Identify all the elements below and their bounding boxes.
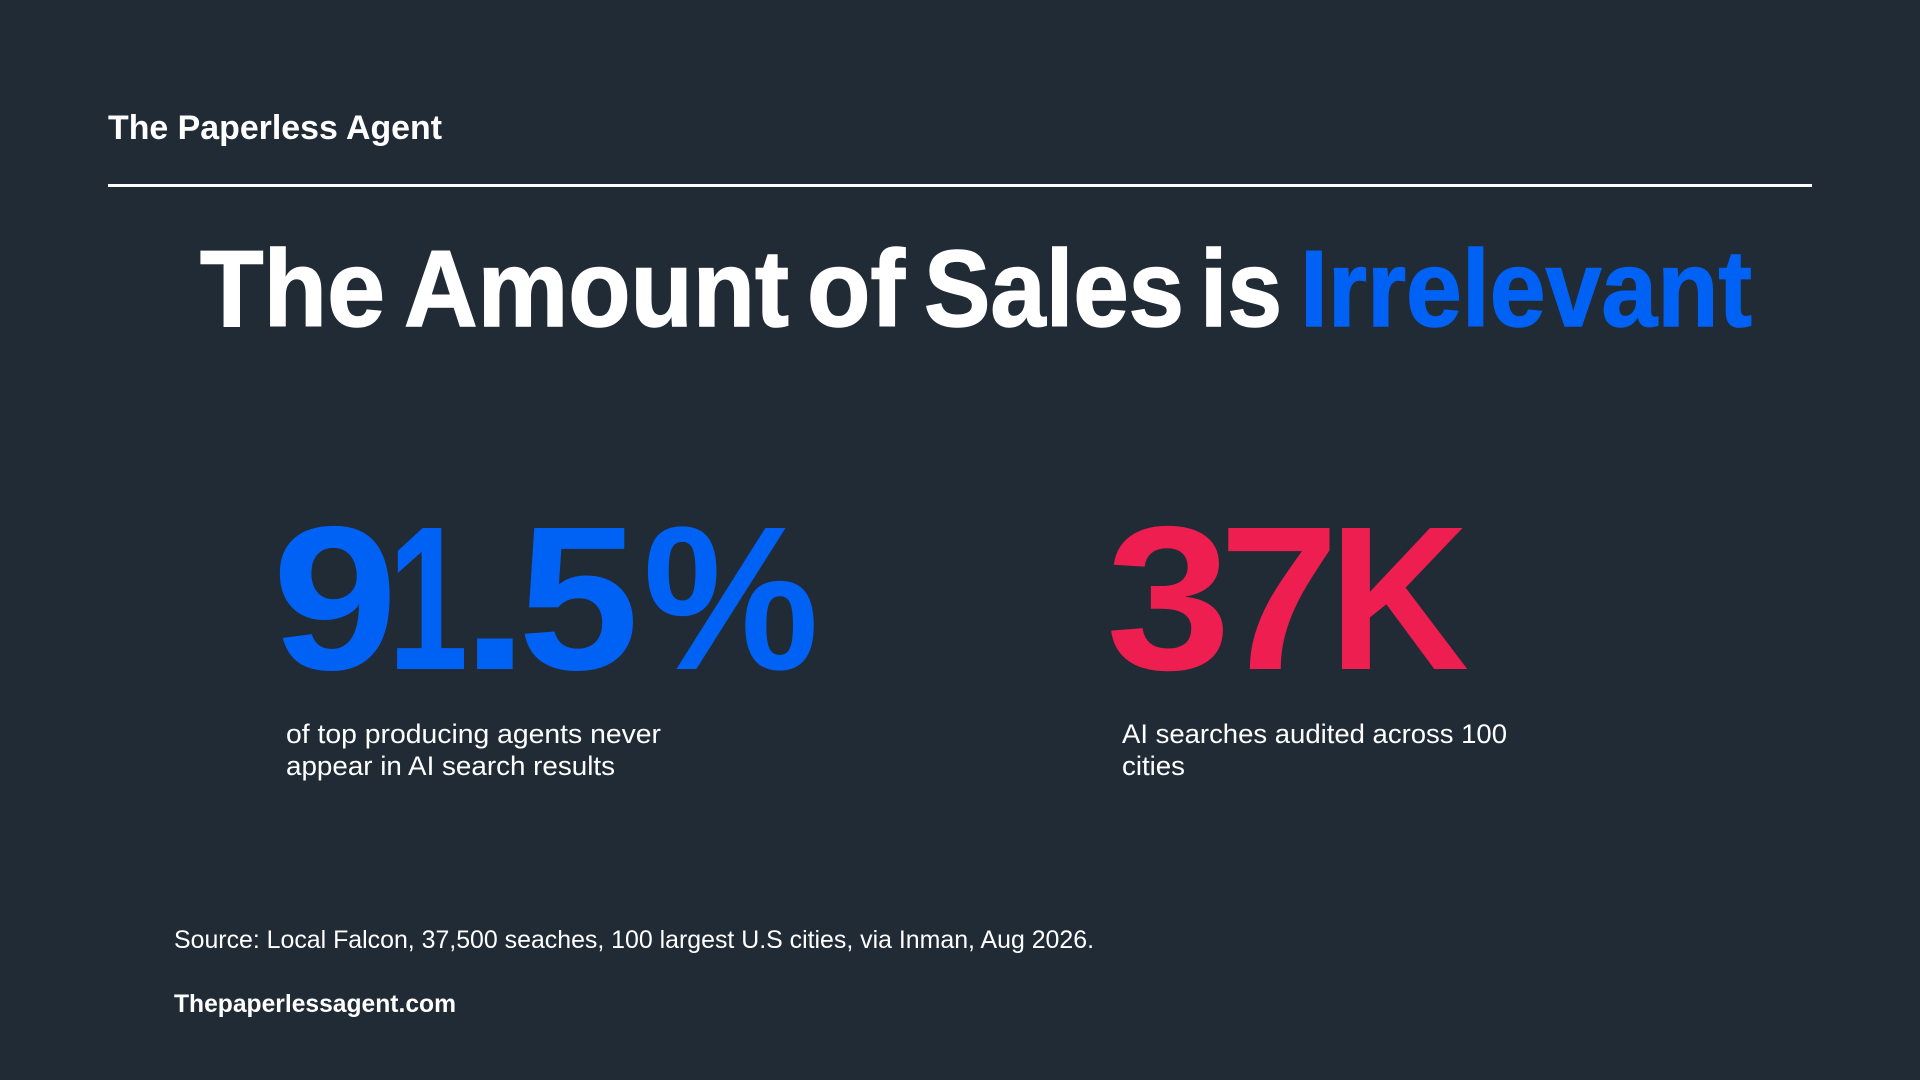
title: white part: of: [807, 228, 906, 350]
brand name: The Paperless Agent: [108, 109, 442, 147]
title: blue highlight: Irrelevant: [1300, 228, 1752, 350]
stat number: 1: [388, 484, 468, 713]
website: Thepaperlessagent.com: [174, 990, 456, 1018]
stat: 37K: [1106, 484, 1507, 781]
title: white part: Sales: [924, 228, 1184, 350]
stat number: 7: [1219, 484, 1339, 713]
title: white part: The: [200, 228, 385, 350]
stat number: 9: [272, 484, 398, 713]
stat caption: AI searches audited across 100: [1122, 719, 1507, 749]
title: white part: Amount: [404, 228, 789, 350]
stat number: 5: [518, 484, 639, 713]
stat number: 3: [1106, 484, 1231, 713]
stat caption: of top producing agents never: [286, 719, 661, 749]
title: white part: is: [1200, 228, 1282, 350]
source note: Source: Local Falcon, 37,500 seaches, 100 largest U.S cities, via Inman, Aug 2026.: [174, 926, 1094, 954]
stat number: %: [643, 484, 819, 713]
title: [200, 228, 1752, 350]
stat caption: cities: [1122, 751, 1185, 781]
stat: 91.5 percent: [272, 484, 819, 781]
stat number: .: [460, 484, 530, 713]
stat caption: appear in AI search results: [286, 751, 615, 781]
stat number: K: [1329, 484, 1469, 713]
